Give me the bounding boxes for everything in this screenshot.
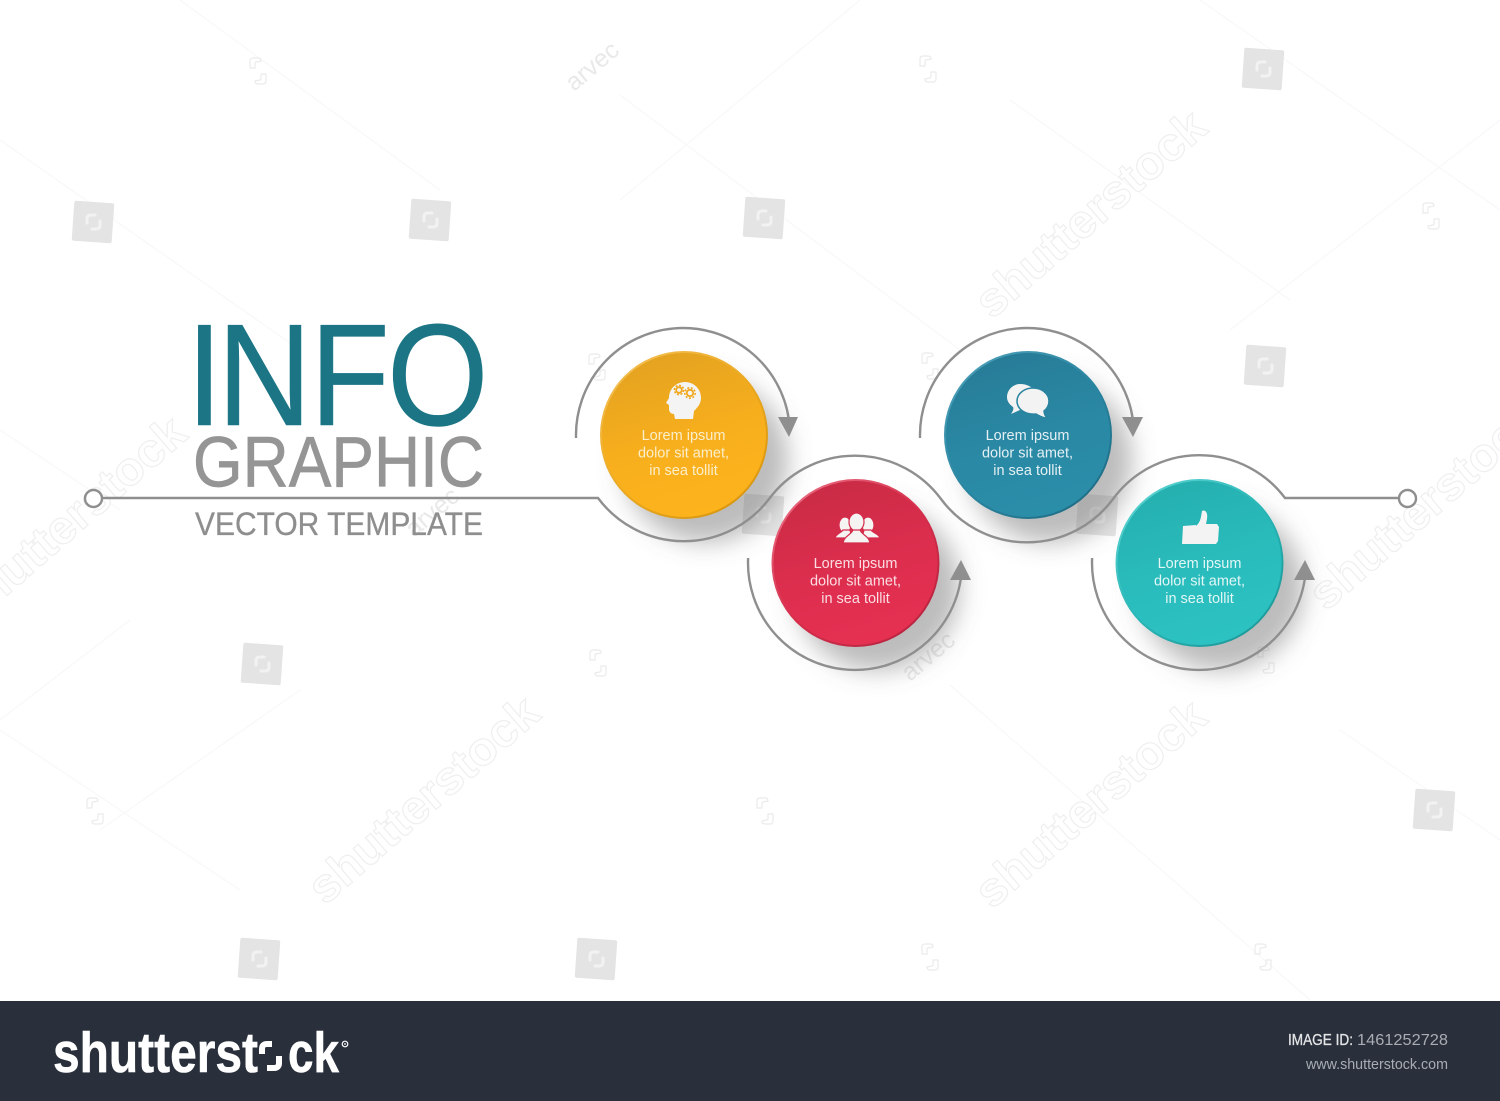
circle drop shadows (622, 377, 1304, 671)
image id: IMAGE ID: (1288, 1032, 1353, 1049)
step 4: teal circle (1116, 479, 1284, 647)
label: dolor sit amet, (1154, 574, 1245, 590)
arrow: teal step (1092, 558, 1315, 670)
label: Lorem ipsum (986, 428, 1069, 444)
label: Lorem ipsum (642, 428, 725, 444)
footer bar (0, 1001, 1500, 1101)
image id (1288, 1032, 1448, 1049)
title (186, 295, 489, 542)
arrow: yellow step (576, 328, 798, 438)
label: in sea tollit (821, 591, 890, 607)
label: Lorem ipsum (814, 556, 897, 572)
arrow: red step (748, 558, 971, 670)
icon: chat bubbles (1007, 384, 1049, 418)
label: in sea tollit (649, 463, 718, 479)
label: dolor sit amet, (810, 574, 901, 590)
watermarks: arvec (896, 626, 961, 687)
end node (1399, 490, 1416, 507)
subtitle: vector template: VECTOR TEMPLATE (195, 506, 483, 542)
watermarks: shutterstock (964, 688, 1217, 918)
watermarks: shutterstock (964, 98, 1217, 328)
label: Lorem ipsum (1158, 556, 1241, 572)
icon: head with gears (666, 382, 701, 419)
step 2: red circle (772, 479, 940, 647)
icon: thumbs up (1182, 511, 1219, 544)
timeline connector (85, 455, 1416, 542)
label: dolor sit amet, (982, 446, 1073, 462)
watermarks: arvec (400, 482, 465, 543)
label: dolor sit amet, (638, 446, 729, 462)
watermarks: shutterstock (297, 684, 550, 914)
image id: 1461252728 (1357, 1032, 1448, 1049)
title word: GRAPHIC: GRAPHIC (193, 424, 484, 502)
arrow: blue step (920, 328, 1143, 438)
shutterstock logo: shutterst (53, 1021, 258, 1085)
watermarks: arvec (560, 36, 625, 97)
label: in sea tollit (1165, 591, 1234, 607)
icon: people (835, 513, 880, 543)
start node (85, 490, 102, 507)
label: in sea tollit (993, 463, 1062, 479)
website: www.shutterstock.com (1305, 1057, 1448, 1073)
step 1: yellow circle (600, 351, 768, 519)
title word: INFO: INFO (186, 295, 489, 457)
shutterstock logo: ck (288, 1021, 339, 1085)
step 3: blue circle (944, 351, 1112, 519)
